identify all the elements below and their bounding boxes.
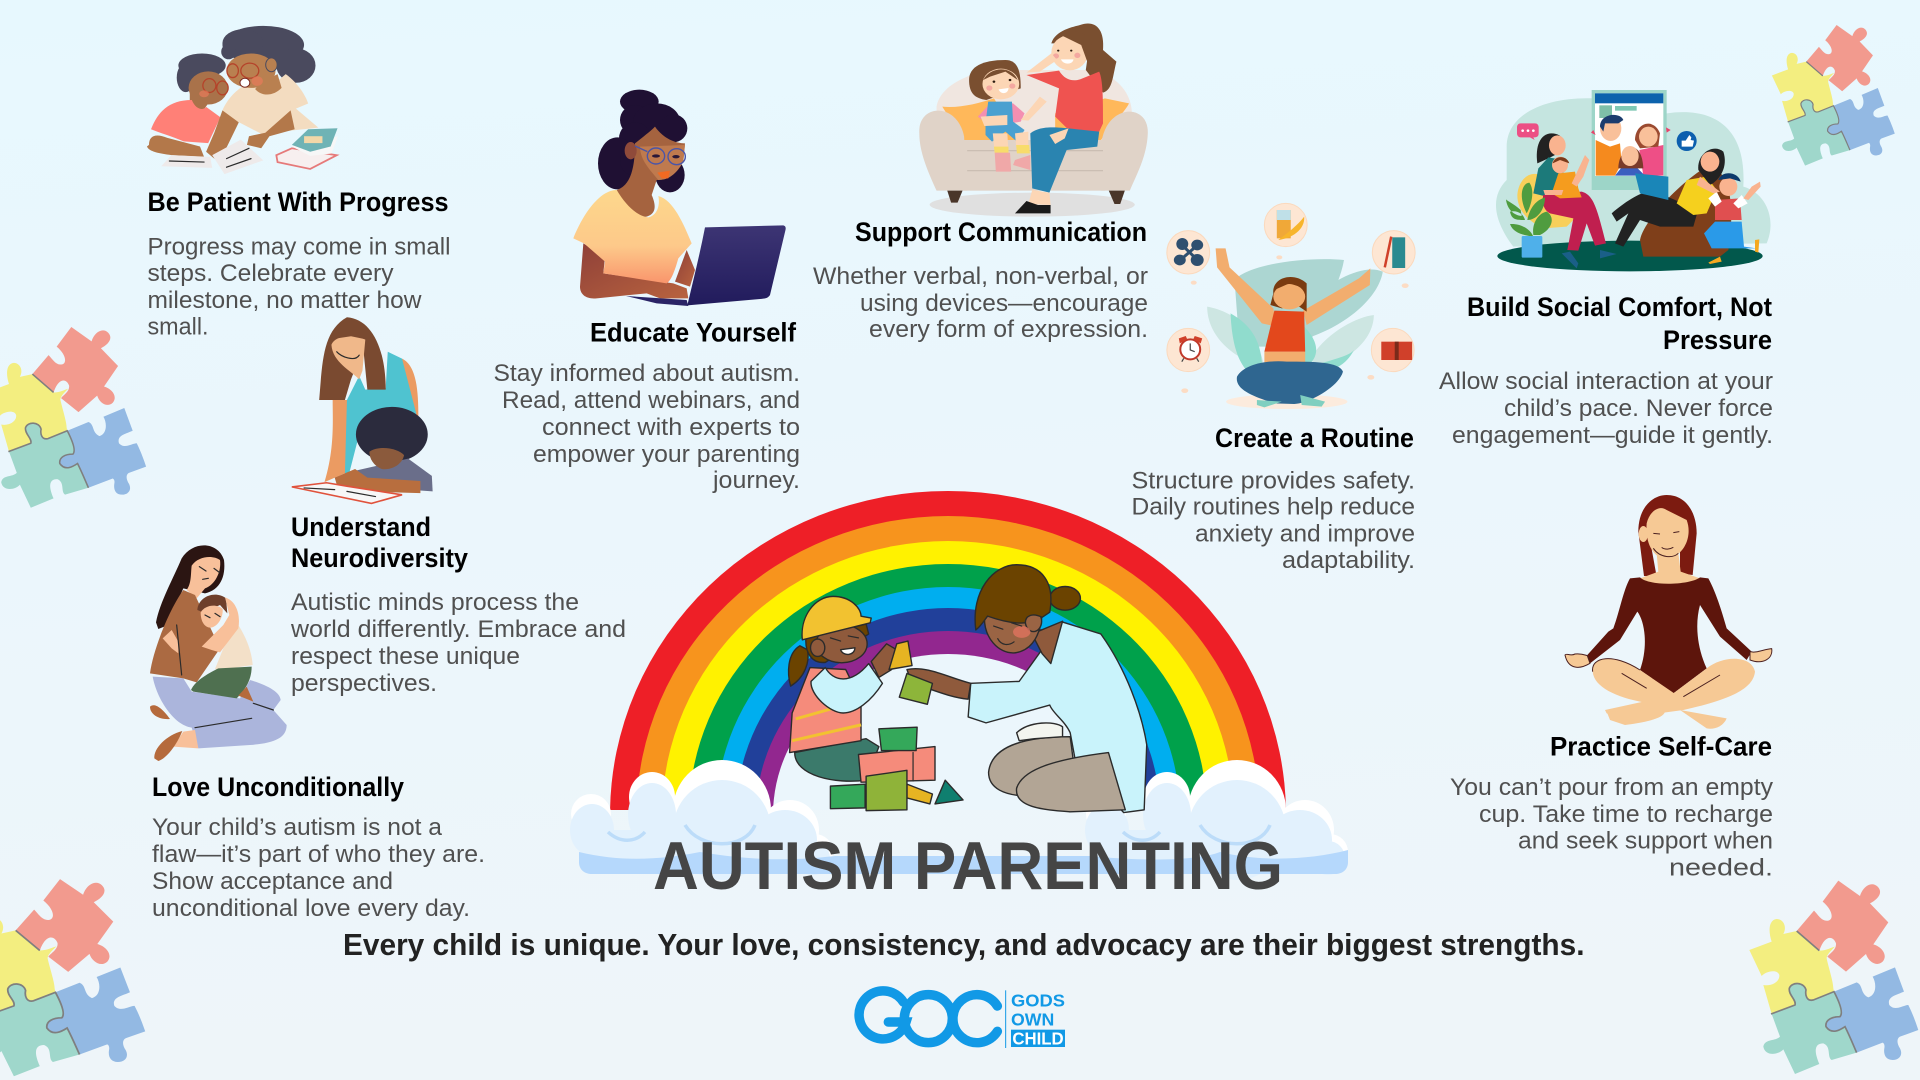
body text: perspectives.: [291, 670, 437, 697]
child: [789, 596, 912, 781]
icon: woman meditating with routine icons: [1167, 203, 1415, 409]
heading: Educate Yourself: [590, 318, 797, 348]
body text: Your child’s autism is not a: [152, 814, 442, 841]
body text: [494, 360, 800, 494]
logo mark GOC: [859, 991, 997, 1043]
panel: build social comfort: [1439, 90, 1773, 449]
body text: milestone, no matter how: [148, 287, 422, 314]
logo wordmark: OWN: [1011, 1009, 1054, 1029]
panel: educate yourself: [494, 90, 800, 494]
body text: journey.: [712, 467, 800, 494]
body text: Stay informed about autism.: [494, 360, 800, 387]
body text: [1439, 368, 1773, 449]
body text: every form of expression.: [869, 316, 1148, 343]
panel: understand neurodiversity: [290, 317, 626, 697]
logo wordmark: GODS: [1011, 990, 1065, 1010]
heading: Understand: [291, 512, 431, 542]
body text: Structure provides safety.: [1132, 468, 1415, 494]
panel: be patient with progress: [147, 26, 450, 341]
logo: Gods Own Child: [859, 990, 1065, 1049]
panel: create a routine: [1132, 203, 1415, 574]
icon: mother and daughter on sofa: [919, 23, 1148, 217]
icon: woman with laptop: [573, 90, 786, 306]
puzzle pieces: left middle: [0, 327, 146, 508]
body text: cup. Take time to recharge: [1479, 801, 1773, 828]
heading: Create a Routine: [1215, 423, 1414, 453]
heading: Build Social Comfort, Not: [1467, 292, 1772, 322]
body text: Read, attend webinars, and: [502, 387, 800, 414]
body text: flaw—it’s part of who they are.: [152, 841, 485, 868]
body text: unconditional love every day.: [152, 895, 470, 922]
cloud: right: [1085, 760, 1348, 880]
cloud: bottom band: [579, 850, 1348, 874]
body text: child’s pace. Never force: [1504, 395, 1773, 422]
panel: practice self-care: [1450, 495, 1774, 882]
heading: Support Communication: [855, 217, 1147, 247]
body text: world differently. Embrace and: [290, 616, 626, 643]
icon: mother guiding child reading: [292, 317, 433, 503]
heading: [1467, 292, 1772, 355]
cloud: left: [570, 760, 833, 880]
body text: engagement—guide it gently.: [1452, 422, 1773, 449]
heading: Love Unconditionally: [152, 772, 404, 802]
body text: small.: [148, 314, 208, 340]
rainbow arcs: [610, 491, 1286, 810]
panel: support communication: [813, 23, 1148, 343]
heading: Neurodiversity: [291, 543, 468, 573]
body text: needed.: [1669, 854, 1773, 882]
body text: Daily routines help reduce: [1132, 494, 1415, 520]
illustration: mother and child playing with blocks: [789, 565, 1147, 813]
body text: empower your parenting: [533, 441, 800, 468]
body text: [1450, 774, 1774, 882]
body text: and seek support when: [1518, 828, 1773, 854]
body text: using devices—encourage: [860, 290, 1148, 317]
body text: steps. Celebrate every: [148, 260, 394, 287]
body text: Allow social interaction at your: [1439, 368, 1773, 395]
puzzle pieces: bottom right: [1749, 881, 1918, 1074]
body text: [813, 263, 1148, 343]
icon: mother and child studying: [147, 26, 338, 174]
body text: connect with experts to: [542, 414, 800, 441]
heading: [291, 512, 468, 573]
body text: [290, 589, 626, 697]
heading: Pressure: [1663, 325, 1772, 355]
mother: [907, 565, 1147, 813]
body text: respect these unique: [291, 643, 520, 670]
puzzle pieces: top right: [1772, 25, 1895, 166]
puzzle pieces: bottom left: [0, 879, 145, 1076]
logo wordmark: CHILD: [1012, 1029, 1064, 1049]
body text: [148, 234, 450, 340]
body text: You can’t pour from an empty: [1450, 774, 1774, 801]
body text: Autistic minds process the: [291, 589, 579, 616]
tagline: Every child is unique. Your love, consistency, and advocacy are their biggest strengths.: [343, 927, 1584, 962]
panel: love unconditionally: [150, 545, 485, 922]
body text: Whether verbal, non-verbal, or: [813, 263, 1148, 290]
icon: families socialising: [1496, 90, 1771, 271]
body text: anxiety and improve: [1195, 520, 1415, 548]
heading: Practice Self-Care: [1550, 732, 1772, 762]
body text: Progress may come in small: [148, 234, 450, 260]
body text: Show acceptance and: [152, 868, 393, 895]
building blocks: [830, 673, 963, 811]
body text: [1132, 468, 1415, 574]
icon: woman in lotus pose: [1565, 495, 1772, 729]
title: AUTISM PARENTING: [653, 828, 1283, 904]
logo wordmark: [1011, 990, 1065, 1049]
icon: mother hugging child: [150, 545, 287, 761]
body text: adaptability.: [1282, 547, 1415, 574]
heading: Be Patient With Progress: [148, 187, 448, 217]
rainbow with clouds: [570, 491, 1348, 880]
body text: [152, 814, 485, 922]
